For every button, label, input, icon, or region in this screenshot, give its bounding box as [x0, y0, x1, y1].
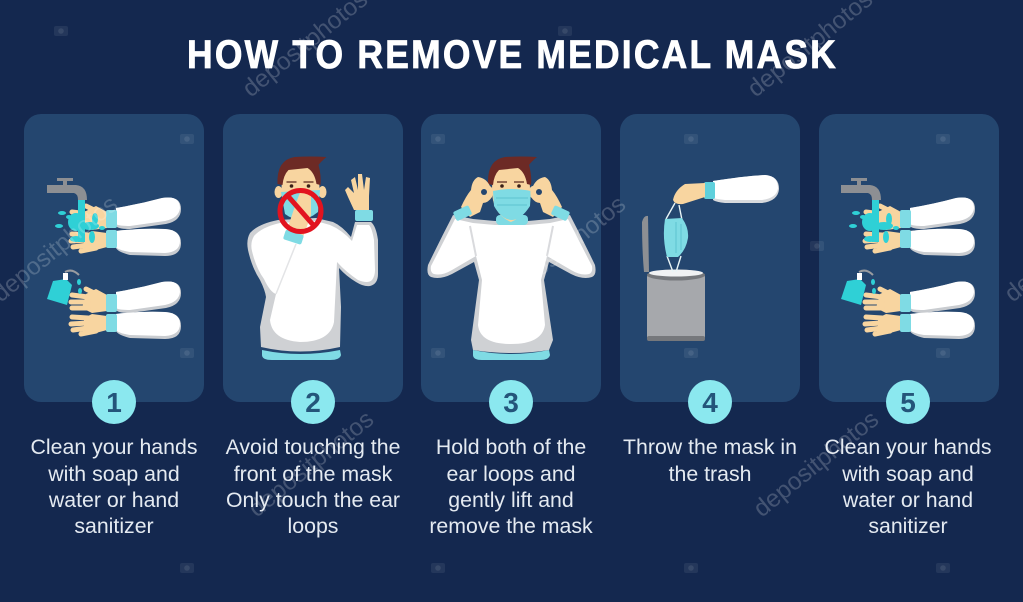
number badge 4: 4 — [702, 387, 718, 418]
caption step 4 — [623, 435, 797, 486]
panel: step 3 — [421, 114, 601, 402]
caption step 1: Clean your hands — [31, 435, 197, 459]
caption step 2 — [226, 435, 400, 538]
caption step 5: with soap and — [841, 462, 974, 486]
watermarks: depositphotos — [495, 191, 631, 308]
caption step 2: loops — [288, 514, 338, 538]
caption step 3: Hold both of the — [436, 435, 586, 459]
caption step 3: remove the mask — [429, 514, 593, 538]
caption step 2: front of the mask — [234, 462, 393, 486]
watermarks: depositphotos — [243, 406, 379, 523]
number badge 2 — [291, 380, 335, 424]
number badge 1 — [92, 380, 136, 424]
sweater silhouette — [247, 218, 378, 352]
caption step 3: gently lift and — [448, 488, 574, 512]
raised hand — [345, 174, 373, 221]
caption step 4: Throw the mask in — [623, 435, 797, 459]
sweater silhouette — [427, 215, 596, 353]
number badge 1: 1 — [106, 387, 122, 418]
caption step 4: the trash — [669, 462, 751, 486]
panel: step 4 — [620, 114, 800, 402]
number badge 5 — [886, 380, 930, 424]
caption step 3: ear loops and — [446, 462, 576, 486]
number badge 5: 5 — [900, 387, 916, 418]
icon: trash bin — [642, 216, 705, 341]
panel: step 1 — [24, 114, 204, 402]
caption step 1: with soap and — [47, 462, 180, 486]
panel: step 5 — [819, 114, 999, 402]
panel: step 2 — [223, 114, 403, 402]
caption step 1: sanitizer — [74, 514, 154, 538]
caption step 3 — [429, 435, 593, 538]
number badge 2: 2 — [305, 387, 321, 418]
icon: washing hands with water and sanitizer — [841, 178, 975, 339]
figure: man avoiding touching mask — [247, 156, 378, 360]
caption step 2: Avoid touching the — [226, 435, 400, 459]
caption step 5 — [825, 435, 991, 538]
caption step 5: sanitizer — [868, 514, 948, 538]
icon: prohibition sign — [280, 190, 321, 232]
icon: washing hands with water and sanitizer — [47, 178, 181, 339]
icon: hand dropping mask — [664, 175, 779, 272]
title: HOW TO REMOVE MEDICAL MASK — [187, 33, 838, 77]
number badge 3: 3 — [503, 387, 519, 418]
caption step 5: water or hand — [842, 488, 973, 512]
caption step 2: Only touch the ear — [226, 488, 400, 512]
number badge 3 — [489, 380, 533, 424]
watermarks: depositphotos — [748, 406, 884, 523]
hands — [461, 177, 493, 217]
number badge 4 — [688, 380, 732, 424]
figure: man lifting mask by ear loops — [427, 156, 596, 360]
caption step 1 — [31, 435, 197, 538]
caption step 1: water or hand — [48, 488, 179, 512]
caption step 5: Clean your hands — [825, 435, 991, 459]
